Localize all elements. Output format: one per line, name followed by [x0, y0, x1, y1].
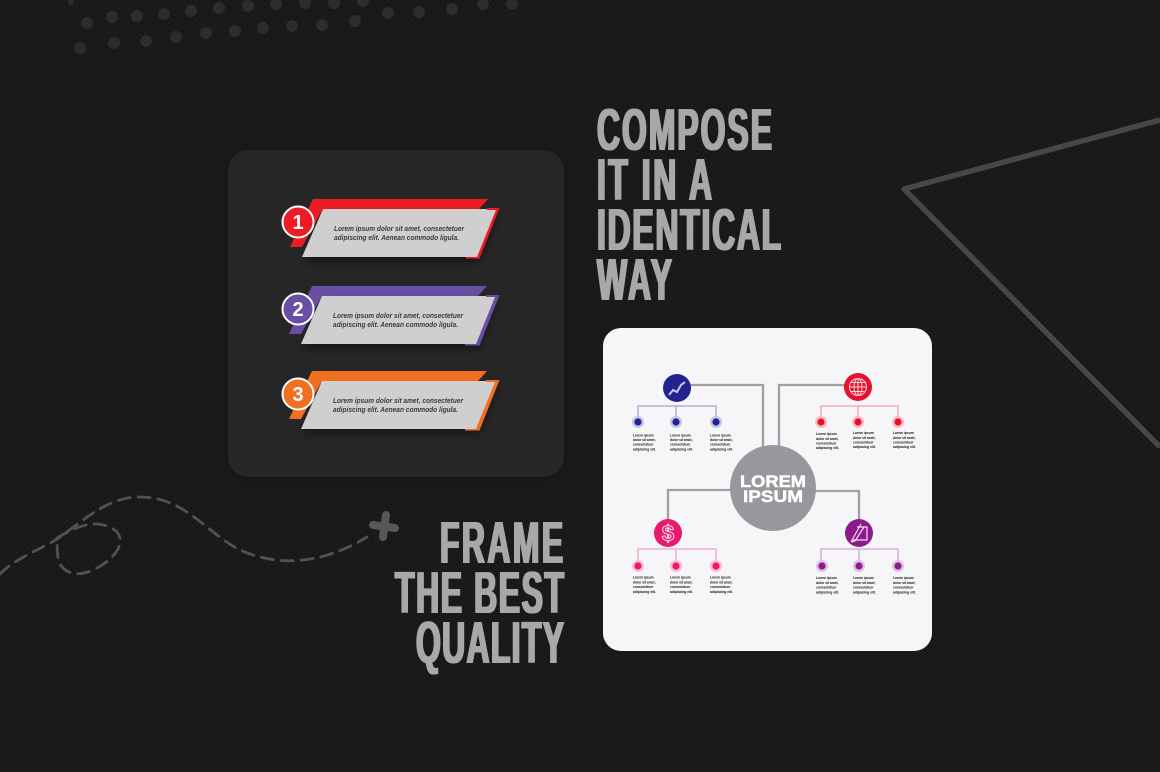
branch: pink dollar: Lorem ipsum: [633, 576, 654, 580]
central circle: LOREM: [740, 472, 806, 491]
banner 2: adipiscing elit. Aenean commodo ligula.: [333, 320, 458, 329]
branch: red globe: Lorem ipsum: [853, 431, 874, 435]
banner 3: 3: [292, 384, 304, 406]
branch: pink dollar: $: [662, 521, 674, 546]
banner 3: adipiscing elit. Aenean commodo ligula.: [333, 405, 458, 414]
decorative dots: [68, 0, 518, 54]
branch: red globe: adipiscing elit.: [816, 446, 839, 450]
central circle: [730, 445, 816, 531]
banner 2: Lorem ipsum dolor sit amet, consectetuer: [333, 311, 464, 320]
banner 1: adipiscing elit. Aenean commodo ligula.: [334, 233, 459, 242]
branch: blue chart: [632, 374, 733, 452]
dashed flight path: [0, 497, 367, 574]
branch: red globe: dolor sit amet,: [853, 436, 876, 440]
plus mark: [373, 515, 395, 537]
main connectors: [668, 385, 859, 522]
branch: purple pen: dolor sit amet,: [893, 581, 916, 585]
branch: purple pen: consectetuer: [853, 586, 874, 590]
branch: blue chart: dolor sit amet,: [710, 438, 733, 442]
branch: red globe: [815, 373, 916, 450]
heading: frame the best quality: QUALITY: [416, 611, 564, 677]
central circle: IPSUM: [743, 487, 803, 506]
branch: blue chart: adipiscing elit.: [710, 448, 733, 452]
heading: compose it in a identical way: IT IN A: [597, 148, 712, 214]
decorative triangle outline: [904, 120, 1160, 447]
branch: purple pen: Lorem ipsum: [816, 576, 837, 580]
branch: purple pen: dolor sit amet,: [853, 581, 876, 585]
heading: frame the best quality: THE BEST: [395, 561, 564, 627]
heading: compose it in a identical way: WAY: [597, 248, 672, 314]
panel: numbered banners: [228, 150, 564, 477]
branch: blue chart: dolor sit amet,: [670, 438, 693, 442]
branch: red globe: consectetuer: [853, 440, 874, 444]
banner 2: [282, 286, 500, 346]
branch: red globe: consectetuer: [893, 440, 914, 444]
branch: purple pen: consectetuer: [893, 586, 914, 590]
branch: pink dollar: dolor sit amet,: [710, 580, 733, 584]
branch: blue chart: dolor sit amet,: [633, 438, 656, 442]
branch: red globe: Lorem ipsum: [816, 432, 837, 436]
banner 1: Lorem ipsum dolor sit amet, consectetuer: [334, 224, 465, 233]
banner 1: [282, 199, 500, 258]
banner 3: Lorem ipsum dolor sit amet, consectetuer: [333, 396, 464, 405]
branch: pink dollar: Lorem ipsum: [710, 576, 731, 580]
branch: purple pen: adipiscing elit.: [853, 590, 876, 594]
branch: purple pen: [816, 519, 916, 594]
branch: pink dollar: dolor sit amet,: [670, 580, 693, 584]
branch: blue chart: Lorem ipsum: [710, 434, 731, 438]
banner 3: [282, 371, 500, 430]
heading: frame the best quality: FRAME: [440, 511, 563, 577]
branch: purple pen: Lorem ipsum: [893, 576, 914, 580]
branch: blue chart: consectetuer: [633, 442, 654, 446]
banner 2: 2: [292, 299, 304, 321]
branch: pink dollar: consectetuer: [710, 585, 731, 589]
heading: compose it in a identical way: COMPOSE: [597, 98, 772, 164]
heading: compose it in a identical way: IDENTICAL: [597, 198, 781, 264]
branch: blue chart: consectetuer: [670, 442, 691, 446]
heading: compose it in a identical way: [597, 98, 781, 314]
branch: blue chart: Lorem ipsum: [670, 434, 691, 438]
branch: pink dollar: Lorem ipsum: [670, 576, 691, 580]
branch: blue chart: Lorem ipsum: [633, 434, 654, 438]
branch: pink dollar: [632, 519, 733, 594]
branch: red globe: adipiscing elit.: [893, 445, 916, 449]
branch: purple pen: Lorem ipsum: [853, 576, 874, 580]
branch: pink dollar: adipiscing elit.: [633, 590, 656, 594]
branch: purple pen: adipiscing elit.: [816, 590, 839, 594]
branch: purple pen: consectetuer: [816, 586, 837, 590]
branch: purple pen: dolor sit amet,: [816, 581, 839, 585]
branch: red globe: adipiscing elit.: [853, 445, 876, 449]
branch: pink dollar: dolor sit amet,: [633, 580, 656, 584]
branch: blue chart: adipiscing elit.: [670, 448, 693, 452]
branch: pink dollar: consectetuer: [633, 585, 654, 589]
panel: mind map: [603, 328, 932, 651]
branch: pink dollar: adipiscing elit.: [670, 590, 693, 594]
branch: pink dollar: adipiscing elit.: [710, 590, 733, 594]
branch: purple pen: adipiscing elit.: [893, 590, 916, 594]
banner 1: 1: [292, 212, 304, 234]
branch: blue chart: consectetuer: [710, 442, 731, 446]
branch: blue chart: adipiscing elit.: [633, 448, 656, 452]
branch: red globe: Lorem ipsum: [893, 431, 914, 435]
branch: red globe: dolor sit amet,: [816, 437, 839, 441]
branch: pink dollar: consectetuer: [670, 585, 691, 589]
branch: red globe: dolor sit amet,: [893, 436, 916, 440]
branch: red globe: consectetuer: [816, 442, 837, 446]
heading: frame the best quality: [395, 511, 564, 677]
